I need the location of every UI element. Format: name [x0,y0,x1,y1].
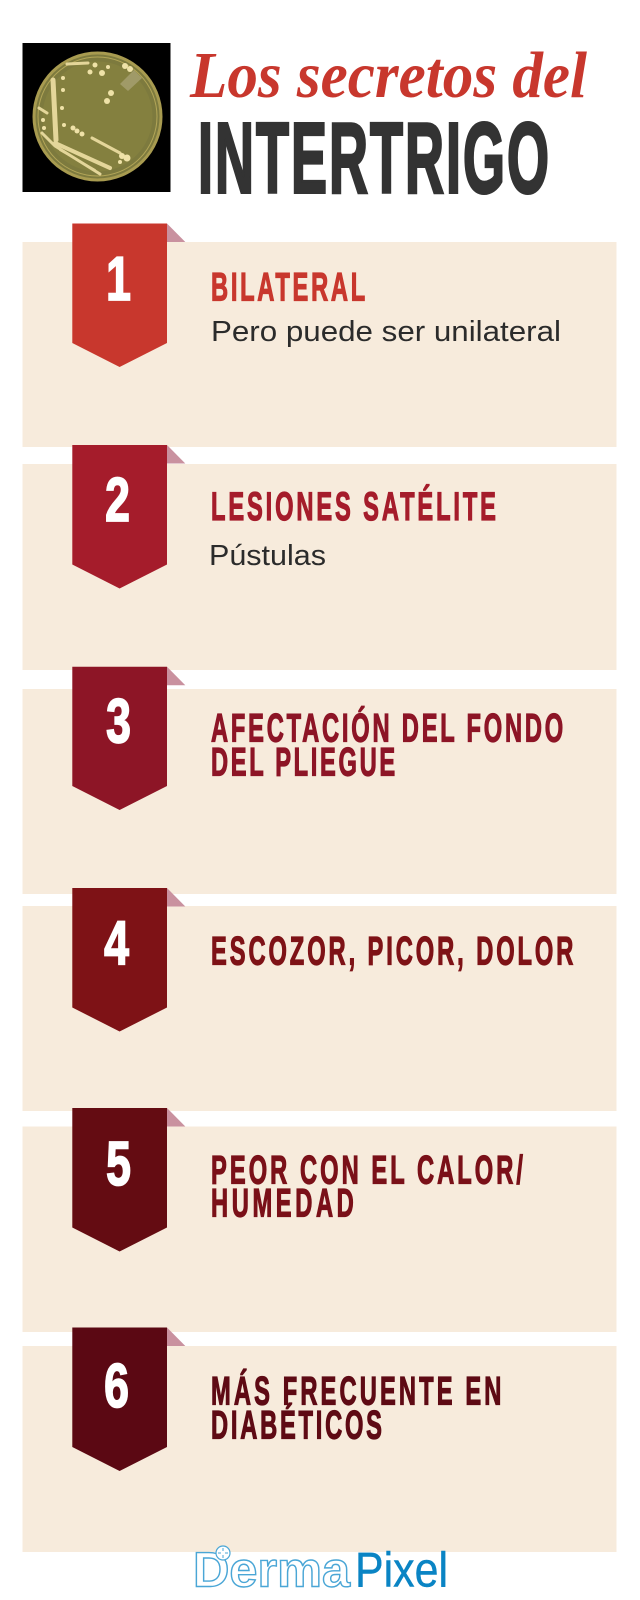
heading 2: LESIONES SATÉLITE [211,484,496,528]
ribbon 6 [72,1328,185,1471]
panel 4: escozor [22,888,616,1111]
ribbon 1: 1 [106,245,131,314]
heading 5: HUMEDAD [211,1181,354,1225]
title: main word: INTERTRIGO [198,103,549,215]
heading 6 [211,1368,501,1447]
heading 5 [211,1148,523,1225]
body text 2: Pústulas [209,540,326,572]
body text 1: Pero puede ser unilateral [211,316,561,348]
heading 3 [211,705,563,784]
title: script line: Los secretos del [189,39,588,112]
heading 6: MÁS FRECUENTE EN [211,1368,501,1413]
heading 4: ESCOZOR, PICOR, DOLOR [211,929,573,973]
ribbon 4 [72,888,185,1032]
heading 5: PEOR CON EL CALOR/ [211,1148,523,1192]
logo: DermaPixel [193,1544,448,1598]
ribbon 5 [72,1108,185,1252]
heading 3: AFECTACIÓN DEL FONDO [211,705,563,750]
ribbon 1 [72,224,185,367]
panel 6: diabeticos [22,1328,616,1552]
logo: DermaPixel: Pixel [355,1544,448,1598]
ribbon 2: 2 [105,466,130,535]
ribbon 5: 5 [106,1130,131,1199]
icon: reticle dot [216,1546,230,1560]
panel 2: lesiones satelite [22,445,616,670]
ribbon 3: 3 [106,687,131,756]
panel 3: fondo del pliegue [22,667,616,894]
ribbon 2 [72,445,185,588]
heading 6: DIABÉTICOS [211,1402,382,1447]
heading 3: DEL PLIEGUE [211,740,395,784]
ribbon 4: 4 [104,909,129,978]
header [22,39,588,215]
heading 1: BILATERAL [211,265,365,309]
ribbon 3 [72,667,185,810]
logo: DermaPixel: Derma [193,1544,351,1598]
photo: petri dish with colonies [22,43,170,192]
ribbon 6: 6 [104,1352,129,1421]
panel 5: calor [22,1108,616,1332]
panel 1: bilateral [22,224,616,447]
